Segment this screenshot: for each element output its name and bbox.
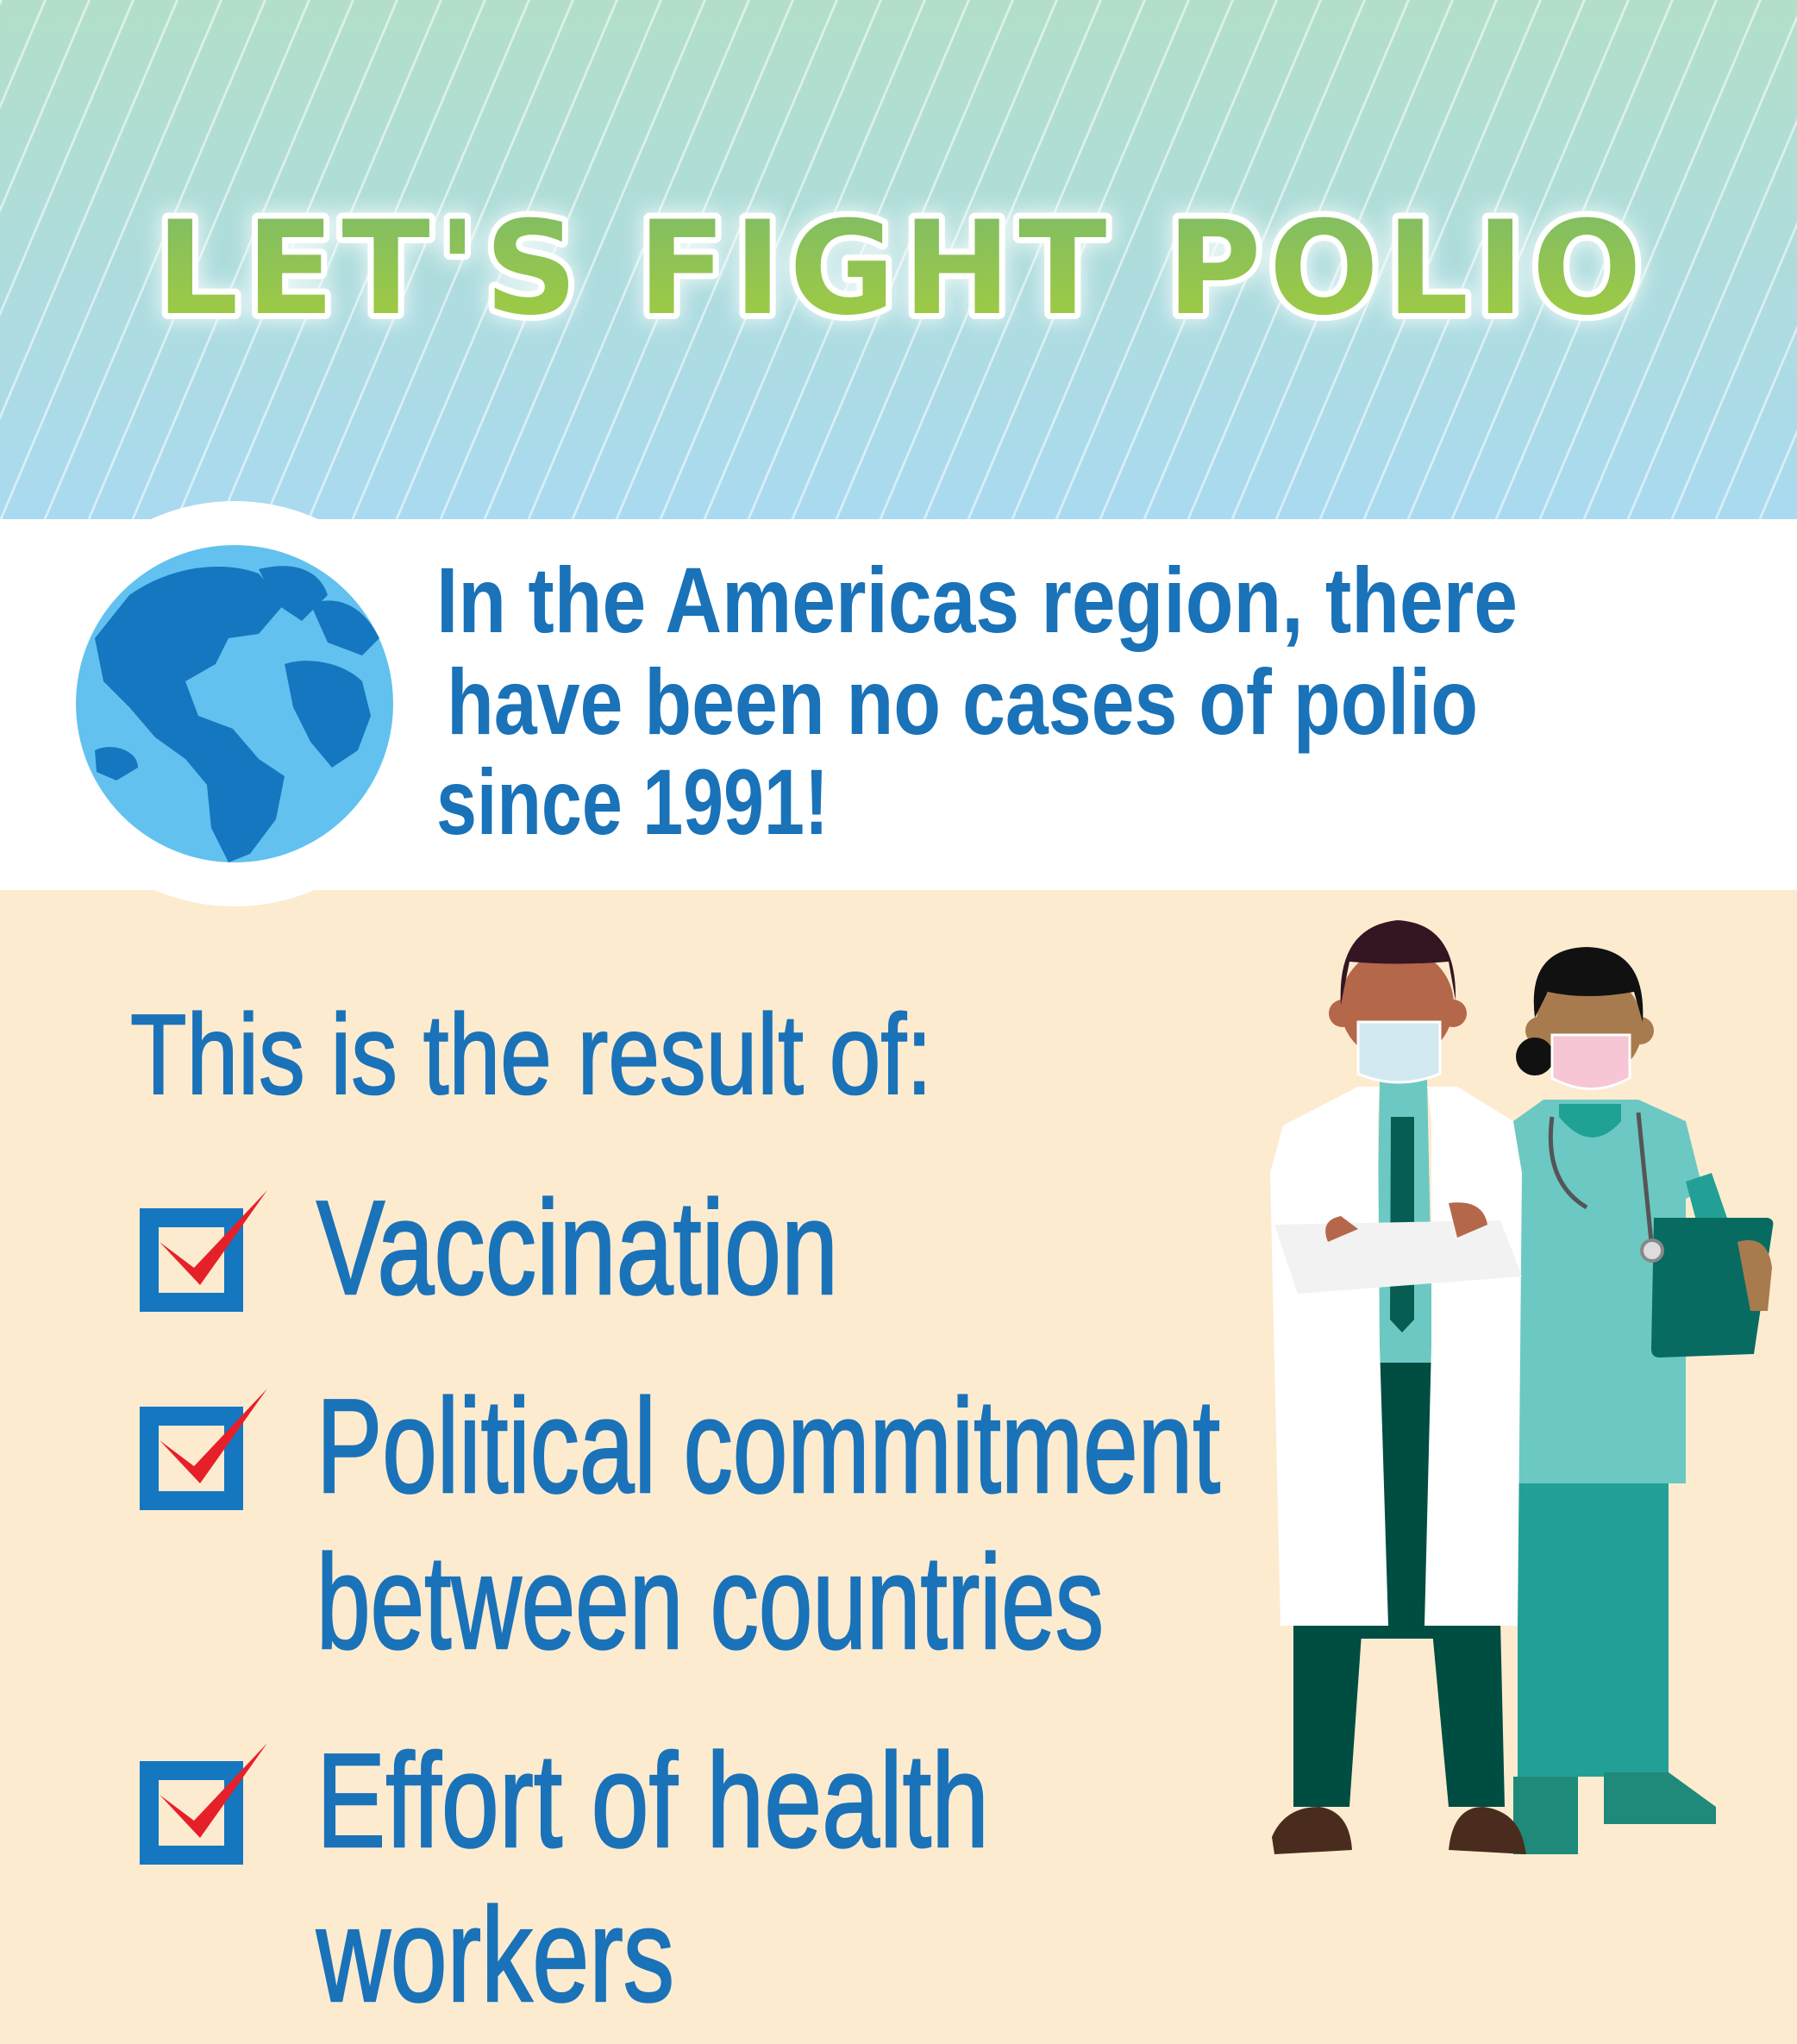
header band bbox=[0, 0, 1797, 519]
title: LET'S FIGHT POLIO bbox=[156, 194, 1642, 344]
list item: vaccination bbox=[149, 1173, 838, 1322]
heading: result of: This is the result of: bbox=[130, 991, 932, 1118]
white info band bbox=[0, 501, 1797, 906]
list item: health workers bbox=[149, 1726, 989, 2029]
list item: political commitment: between countries bbox=[316, 1527, 1104, 1677]
text: americas statement bbox=[436, 548, 1518, 854]
list item: political commitment bbox=[149, 1371, 1220, 1677]
list item: health workers: Effort of health bbox=[316, 1726, 989, 1875]
woman bbox=[1513, 947, 1773, 1854]
man bbox=[1270, 920, 1526, 1854]
title: LET'S FIGHT POLIO bbox=[156, 194, 1642, 344]
text: americas statement: since 1991! bbox=[436, 749, 829, 854]
illustration: health workers bbox=[1270, 920, 1773, 1854]
text: americas statement: In the Americas region, there bbox=[436, 548, 1518, 652]
list item: health workers: workers bbox=[316, 1880, 674, 2029]
text: americas statement: have been no cases of polio bbox=[447, 649, 1478, 754]
icon: globe bbox=[76, 545, 393, 862]
list item: political commitment: Political commitment bbox=[316, 1371, 1220, 1520]
list item: vaccination: Vaccination bbox=[316, 1173, 838, 1322]
title: LET'S FIGHT POLIO bbox=[156, 194, 1642, 344]
